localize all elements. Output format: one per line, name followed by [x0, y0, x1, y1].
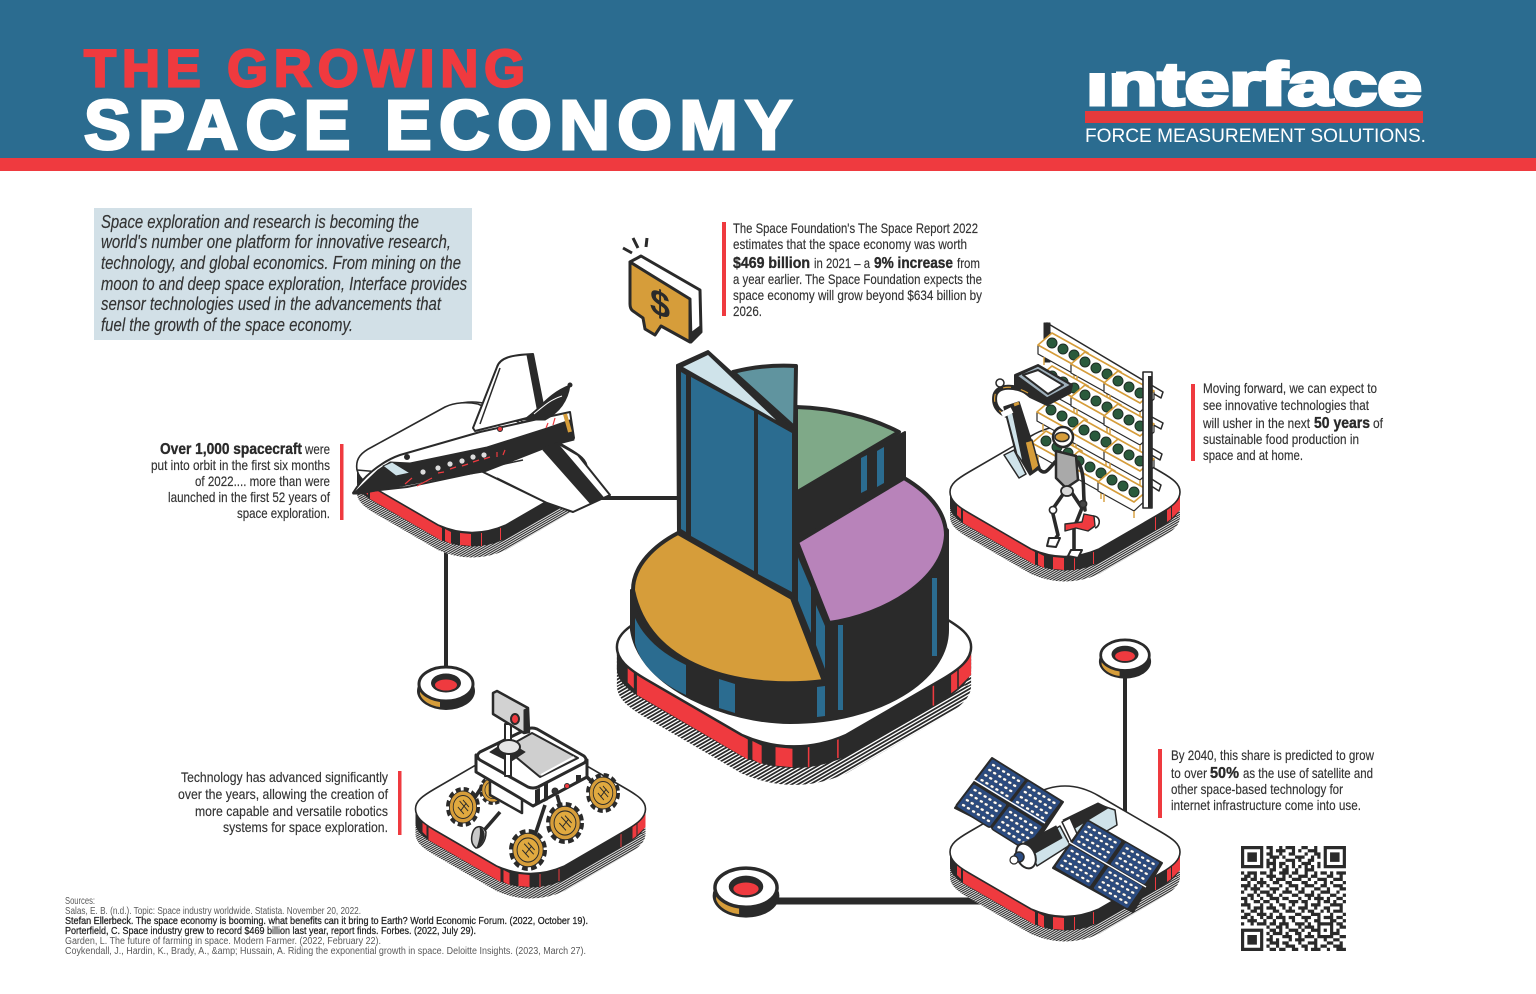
QR code	[1241, 848, 1346, 949]
text block: space economy value: estimates that the space economy was worth	[733, 236, 967, 252]
title: SPACE ECONOMY	[84, 86, 792, 164]
text block: robotics: systems for space exploration.	[223, 819, 388, 835]
shuttle text: red marker	[340, 444, 344, 520]
text block: space economy value: in 2021 – a	[814, 255, 870, 271]
text block: food production	[1202, 380, 1383, 463]
text block: food production: Moving forward, we can expect to	[1203, 380, 1377, 396]
slice: green	[796, 407, 899, 493]
text block: satellite internet: internet infrastructure come into use.	[1171, 797, 1361, 813]
text block: spacecraft launched: Over 1,000 spacecraft	[160, 441, 303, 458]
farm rack	[1044, 323, 1163, 491]
humanoid robot	[1040, 462, 1085, 550]
intro text panel: Space exploration and research is becoming the	[101, 212, 419, 232]
text block: space economy value: 9% increase	[874, 255, 953, 272]
sources: Coykendall, J., Hardin, K., Brady, A., &amp; Hussain, A. Riding the exponential growth in space. Deloitte Insights. (2023, March 27).	[65, 946, 586, 957]
top text: red marker	[722, 222, 726, 316]
text block: space economy value: The Space Foundation's The Space Report 2022	[733, 220, 978, 236]
illustration: rover	[448, 691, 618, 869]
sources: Salas, E. B. (n.d.). Topic: Space industry worldwide. Statista. November 20, 2022.	[65, 906, 361, 917]
pie cylinder body	[631, 432, 948, 723]
rover mast	[505, 724, 511, 776]
logo: Interface: interface	[1086, 51, 1422, 118]
sources: Stefan Ellerbeck. The space economy is booming. what benefits can it bring to Earth? World Economic Forum. (2022, October 19).	[65, 916, 588, 927]
intro text panel: sensor technologies used in the advancements that	[101, 294, 442, 314]
text block: satellite internet	[1171, 747, 1375, 813]
text block: satellite internet: 50%	[1210, 765, 1239, 782]
intro text panel	[94, 208, 472, 340]
intro text panel: fuel the growth of the space economy.	[101, 315, 353, 335]
icon: connector ring top right	[1099, 640, 1151, 679]
rover scoop	[472, 827, 486, 848]
icon: dollar speech bubble	[623, 238, 701, 342]
text block: food production: space and at home.	[1203, 447, 1303, 463]
text block: food production: 50 years	[1314, 415, 1370, 432]
intro text panel: moon to and deep space exploration, Interface provides	[101, 274, 467, 294]
platform: shuttle	[357, 402, 587, 558]
pie side windows	[635, 555, 937, 717]
text block: spacecraft launched: put into orbit in the first six months	[151, 457, 330, 473]
blue tall column	[677, 351, 797, 600]
text block: space economy value: from	[957, 255, 980, 271]
text block: satellite internet: By 2040, this share is predicted to grow	[1171, 747, 1375, 763]
text block: space economy value: $469 billion	[733, 255, 810, 272]
satellite modules	[1010, 803, 1117, 872]
sources: Sources:	[65, 896, 95, 907]
sources: Porterfield, C. Space industry grew to record $469 billion last year, report finds. Forbes. (2022, July 29).	[65, 926, 476, 937]
slice: gold	[633, 533, 824, 683]
icon: dollar speech bubble: $	[650, 279, 670, 328]
text block: robotics	[178, 769, 388, 835]
rover wheels	[448, 789, 478, 825]
text block: satellite internet: to over	[1171, 765, 1207, 781]
watering can	[1065, 514, 1095, 531]
text block: satellite internet: as the use of satellite and	[1243, 765, 1373, 781]
text block: food production: sustainable food production in	[1203, 431, 1359, 447]
text block: spacecraft launched: launched in the first 52 years of	[168, 489, 330, 505]
solar panel wing one	[955, 758, 1063, 850]
text block: space economy value: space economy will grow beyond $634 billion by	[733, 287, 982, 303]
text block: space economy value	[733, 220, 982, 319]
intro text panel: technology, and global economics. From mining on the	[101, 253, 461, 273]
logo: Interface	[1082, 51, 1426, 147]
icon: connector ring bottom	[713, 868, 779, 918]
slice: purple	[797, 478, 946, 623]
rover body	[490, 778, 522, 813]
sources: Garden, L. The future of farming in space. Modern Farmer. (2022, February 22).	[65, 936, 381, 947]
satellite text: red marker	[1158, 749, 1162, 818]
chart: isometric pie	[631, 351, 948, 723]
connector lines	[446, 498, 1125, 901]
text block: food production: of	[1373, 415, 1383, 431]
illustration: vertical farm and robot	[995, 323, 1163, 558]
slice: teal	[733, 366, 796, 428]
title	[84, 40, 792, 164]
text block: food production: will usher in the next	[1202, 415, 1310, 431]
farm text: red marker	[1191, 384, 1195, 461]
platform: rover	[416, 743, 646, 898]
text block: robotics: more capable and versatile robotics	[195, 803, 388, 819]
text block: food production: see innovative technologies that	[1203, 397, 1369, 413]
solar panel wing two	[1053, 820, 1162, 912]
illustration: space shuttle	[353, 354, 610, 512]
platform: satellite	[950, 786, 1180, 942]
text block: satellite internet: other space-based technology for	[1171, 781, 1343, 797]
platform: central pie base	[617, 545, 971, 785]
text block: spacecraft launched	[151, 441, 330, 521]
platform: space farming	[950, 426, 1180, 582]
icon: connector ring left	[417, 667, 475, 710]
rover text: red marker	[398, 771, 402, 835]
text block: spacecraft launched: were	[304, 441, 330, 457]
text block: robotics: Technology has advanced significantly	[181, 769, 388, 785]
sources	[65, 896, 588, 957]
robotic arm	[1015, 365, 1072, 405]
text block: spacecraft launched: space exploration.	[237, 505, 330, 521]
text block: spacecraft launched: of 2022.... more than were	[195, 473, 330, 489]
title: THE GROWING	[84, 40, 525, 98]
logo: Interface: FORCE MEASUREMENT SOLUTIONS.	[1085, 126, 1426, 147]
illustration: satellite	[955, 758, 1162, 912]
intro text panel: world's number one platform for innovative research,	[101, 232, 451, 252]
text block: space economy value: 2026.	[733, 303, 762, 319]
header banner	[0, 0, 1536, 171]
text block: robotics: over the years, allowing the creation of	[178, 786, 388, 802]
text block: space economy value: a year earlier. The Space Foundation expects the	[733, 271, 982, 287]
